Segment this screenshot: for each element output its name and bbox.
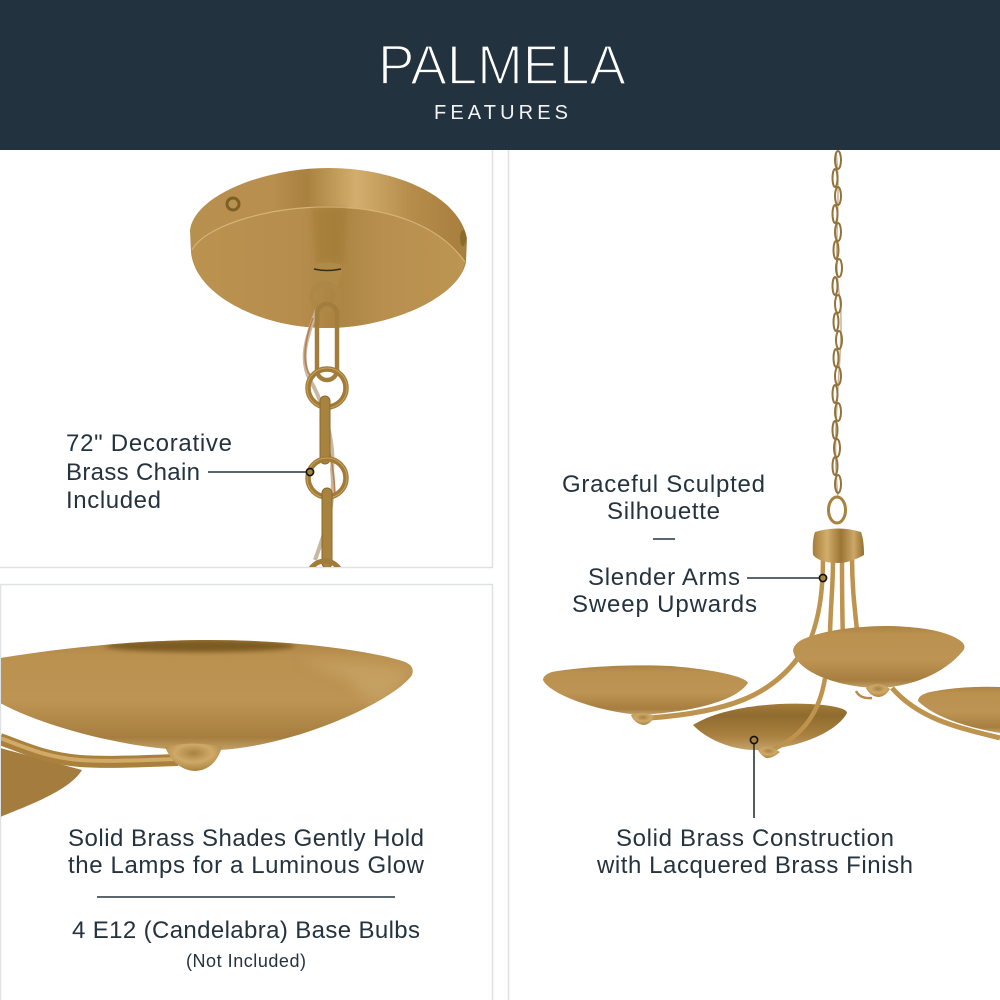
subtitle: FEATURES [434,102,568,124]
panel: full chandelier [508,150,1000,1000]
callout: construction [596,736,913,879]
callout: shades: Solid Brass Shades Gently Hold [68,825,424,852]
header banner [0,0,1000,150]
callout: silhouette and arms: Graceful Sculpted [562,471,765,498]
left shade [543,665,748,715]
callout: chain: Included [66,487,161,514]
callout: silhouette and arms: Slender Arms [588,564,740,591]
callout: chain [66,430,314,514]
stems and arms [650,556,1000,750]
callout: chain: 72" Decorative [66,430,232,457]
callout: construction: with Lacquered Brass Finish [596,852,913,879]
callout: chain: Brass Chain [66,459,200,486]
shade caps [631,684,890,758]
callout: shades: the Lamps for a Luminous Glow [68,852,425,879]
hub [813,528,864,563]
callout: shades: (Not Included) [186,951,306,971]
panel: brass shades [0,584,492,1000]
chain links [305,262,347,595]
title: PALMELA [378,33,627,96]
callout: silhouette and arms: Sweep Upwards [572,591,757,618]
close-up shade [0,640,413,817]
callout: shades: 4 E12 (Candelabra) Base Bulbs [72,917,420,944]
hanging chain [828,151,846,523]
chandelier [543,528,1000,758]
ceiling canopy [190,168,467,328]
top shade [793,626,964,688]
panel: decorative chain [0,150,492,595]
bottom shade [693,704,847,750]
callout: silhouette and arms [562,471,827,618]
callout: silhouette and arms: Silhouette [607,498,720,525]
right shade [918,687,1000,733]
callout: shades [68,825,425,971]
callout: construction: Solid Brass Construction [616,825,894,852]
